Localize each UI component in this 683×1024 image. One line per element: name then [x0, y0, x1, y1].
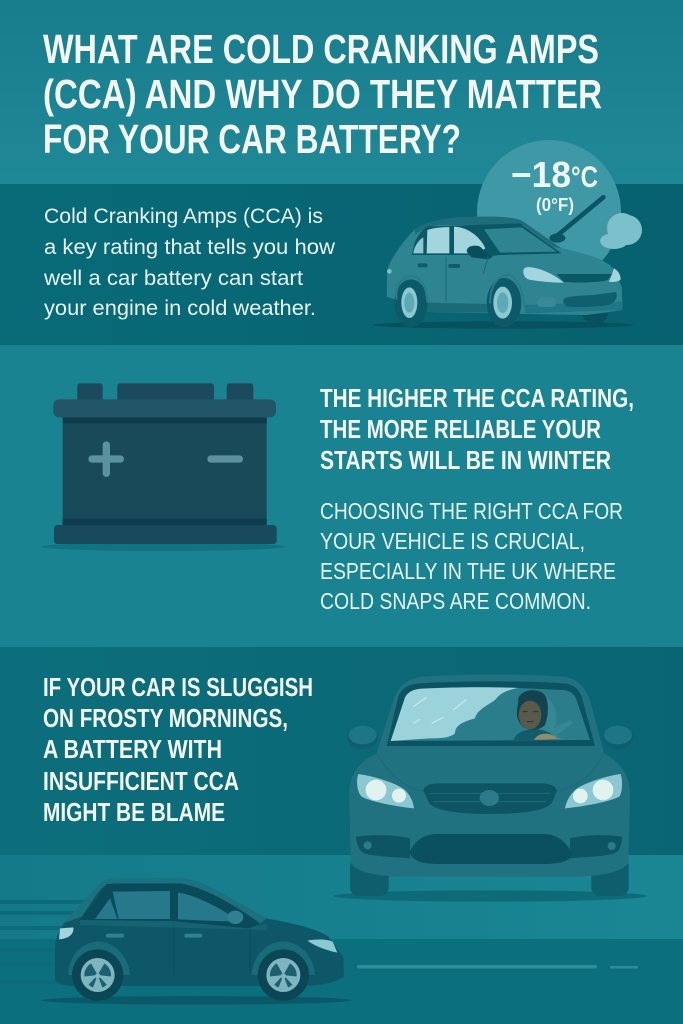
text block: choosing the right CCA — [320, 498, 623, 614]
illustration: front view car with driver — [333, 675, 647, 902]
title — [43, 26, 602, 162]
intro text block: Cold Cranking Amps (CCA) is — [44, 205, 323, 228]
intro text block — [43, 205, 336, 320]
plus symbol — [92, 445, 120, 473]
illustration: sedan in the cold — [373, 197, 633, 329]
intro text block: a key rating that tells you how — [44, 236, 336, 259]
text block: choosing the right CCA: CHOOSING THE RIGHT CCA FOR — [320, 498, 623, 524]
temperature circle: °C — [571, 161, 598, 194]
illustration: moving hatchback — [42, 878, 352, 1005]
wheel front — [266, 958, 300, 992]
temperature circle — [477, 140, 621, 284]
battery terminals — [77, 383, 253, 402]
heading: sluggish on frosty mornings: IF YOUR CAR IS SLUGGISH — [43, 672, 313, 702]
temperature circle: (0°F) — [536, 195, 574, 215]
heading: sluggish on frosty mornings: INSUFFICIENT CCA — [43, 766, 239, 796]
intro text block: well a car battery can start — [43, 267, 303, 290]
heading: higher CCA — [320, 383, 634, 475]
text block: choosing the right CCA: COLD SNAPS ARE COMMON. — [320, 588, 591, 614]
heading: sluggish on frosty mornings: ON FROSTY MORNINGS, — [43, 703, 288, 733]
icon: steam cloud — [600, 213, 642, 249]
heading: higher CCA: THE MORE RELIABLE YOUR — [320, 414, 601, 444]
text block: choosing the right CCA: ESPECIALLY IN THE UK WHERE — [320, 558, 616, 584]
heading: sluggish on frosty mornings — [43, 672, 313, 827]
minus symbol — [211, 448, 239, 470]
intro text block: your engine in cold weather. — [44, 297, 316, 320]
icon: car battery — [42, 383, 285, 551]
speed lines — [0, 900, 85, 984]
heading: sluggish on frosty mornings: A BATTERY WITH — [43, 734, 222, 764]
text block: choosing the right CCA: YOUR VEHICLE IS CRUCIAL, — [320, 528, 585, 554]
heading: sluggish on frosty mornings: MIGHT BE BLAME — [43, 797, 225, 827]
title: FOR YOUR CAR BATTERY? — [43, 116, 461, 162]
wheel rear — [81, 958, 115, 992]
temperature circle: −18 — [511, 154, 571, 195]
road markings — [357, 965, 638, 968]
heading: higher CCA: STARTS WILL BE IN WINTER — [320, 445, 611, 475]
